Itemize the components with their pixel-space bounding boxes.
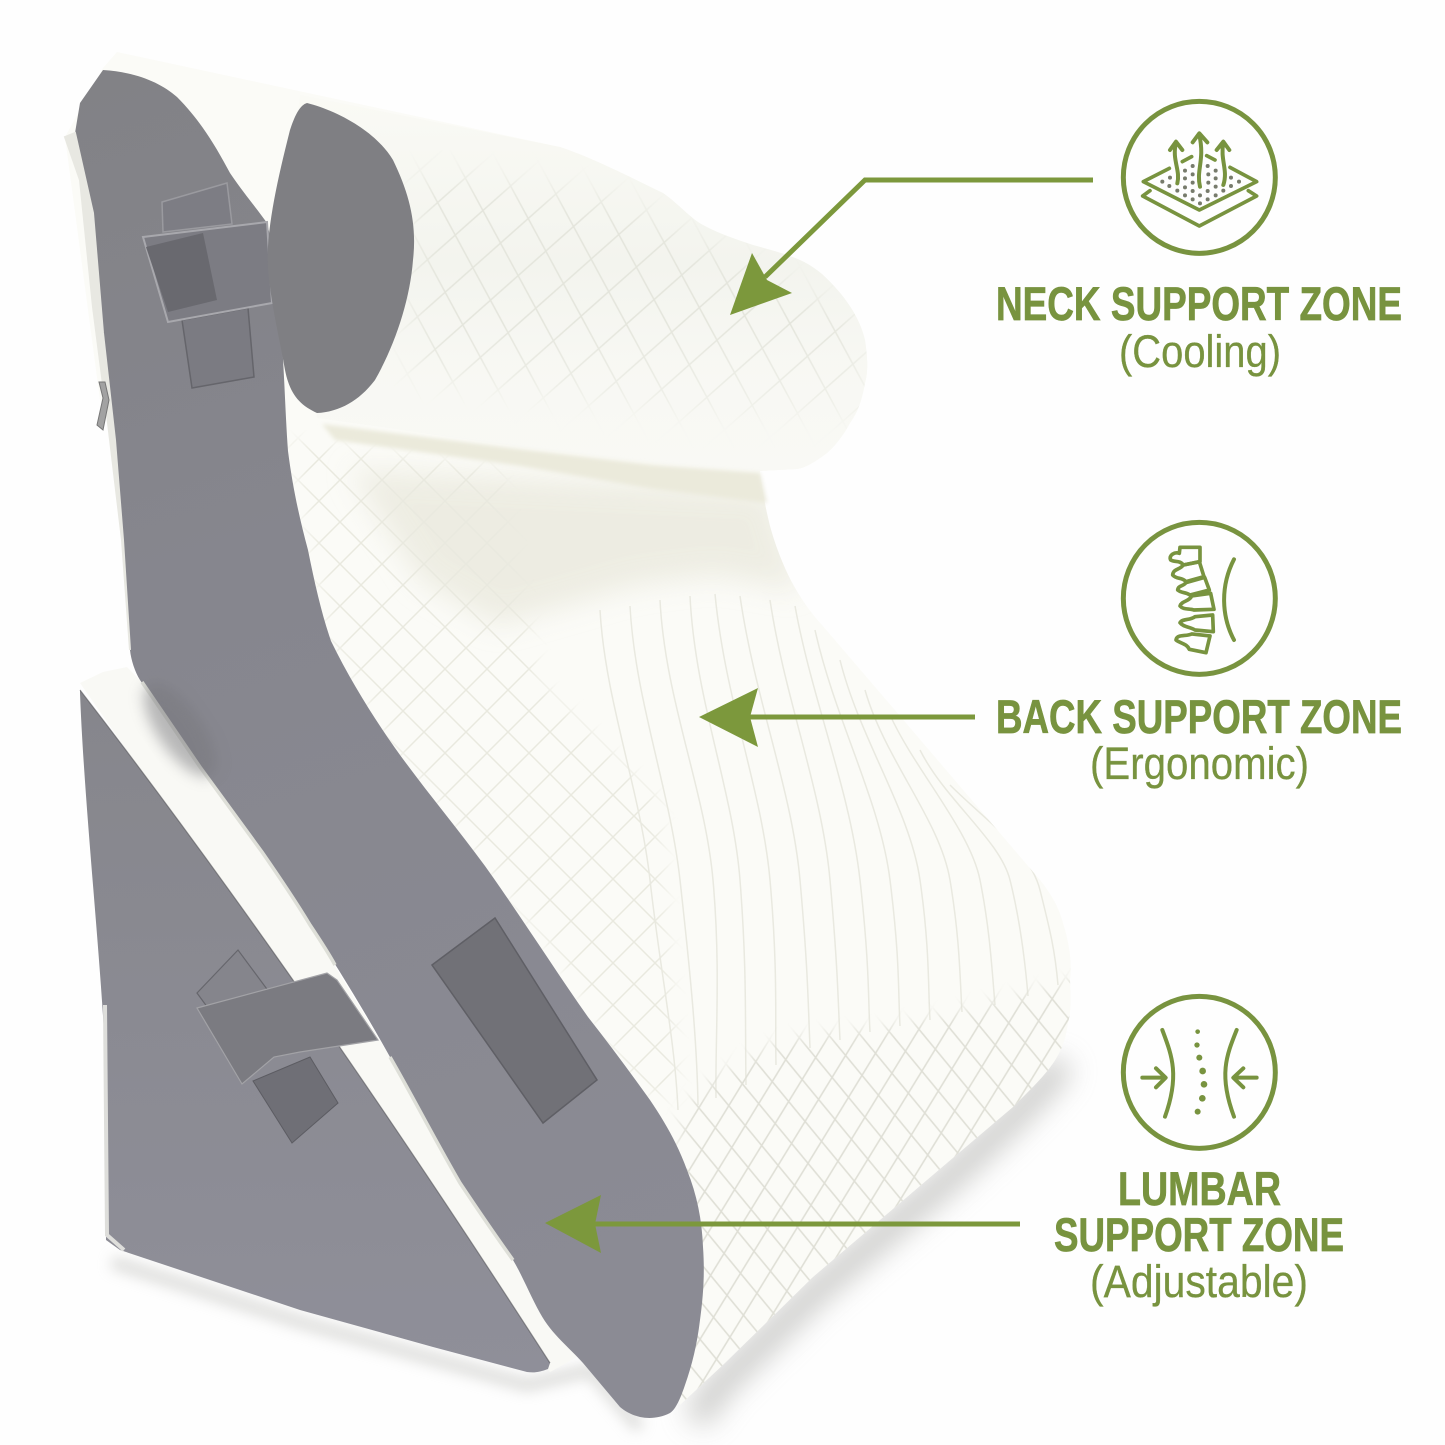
quilting: upper left grid (280, 430, 700, 1110)
lumbar wedge white face (80, 667, 577, 1372)
heading: support zone: SUPPORT ZONE (1054, 1208, 1344, 1261)
wedge edge line (80, 690, 550, 1363)
roll lower fade (558, 376, 851, 417)
neck roll pillow (396, 158, 866, 418)
subheading: ergonomic: (Ergonomic) (1090, 738, 1309, 789)
wedge white piping (105, 1005, 124, 1250)
lower velcro patch upper strip (182, 308, 254, 388)
shadow band under roll (322, 424, 767, 503)
quilting: lower diamonds (676, 976, 1070, 1400)
quilting: lengthwise fan lines (600, 594, 1058, 1110)
icon: lumbar (1123, 996, 1275, 1148)
zipper pull (97, 382, 109, 430)
icon: cooling layers (1123, 101, 1275, 253)
top strap loop (143, 222, 272, 322)
wedge velcro patch (253, 1057, 338, 1143)
strip left piping (65, 133, 130, 650)
back support body (288, 431, 1070, 1400)
subheading: adjustable: (Adjustable) (1090, 1256, 1308, 1307)
top pocket patch (162, 183, 232, 232)
lower strap (197, 973, 378, 1084)
neck roll grey end cap (268, 103, 414, 413)
grey side strip (65, 70, 704, 1418)
subheading: cooling: (Cooling) (1119, 326, 1281, 377)
ground shadow (112, 1062, 1062, 1428)
icon: spine (1123, 522, 1275, 674)
top strap velcro (146, 233, 217, 312)
roll quilting (408, 170, 865, 410)
lumbar wedge grey side (80, 690, 550, 1372)
wedge upper stitched tab (197, 950, 275, 1045)
arrow: lumbar support (545, 1195, 1020, 1253)
product illustration: wedge pillow (65, 52, 1090, 1428)
strip velcro patch (432, 918, 597, 1123)
strip lower piping (142, 682, 513, 1260)
upper back cream shading (350, 470, 800, 625)
arrow: neck support (730, 180, 1093, 315)
arrow: back support (699, 688, 975, 747)
strip worn shading (130, 672, 230, 788)
heading: lumbar: LUMBAR (1118, 1162, 1281, 1215)
